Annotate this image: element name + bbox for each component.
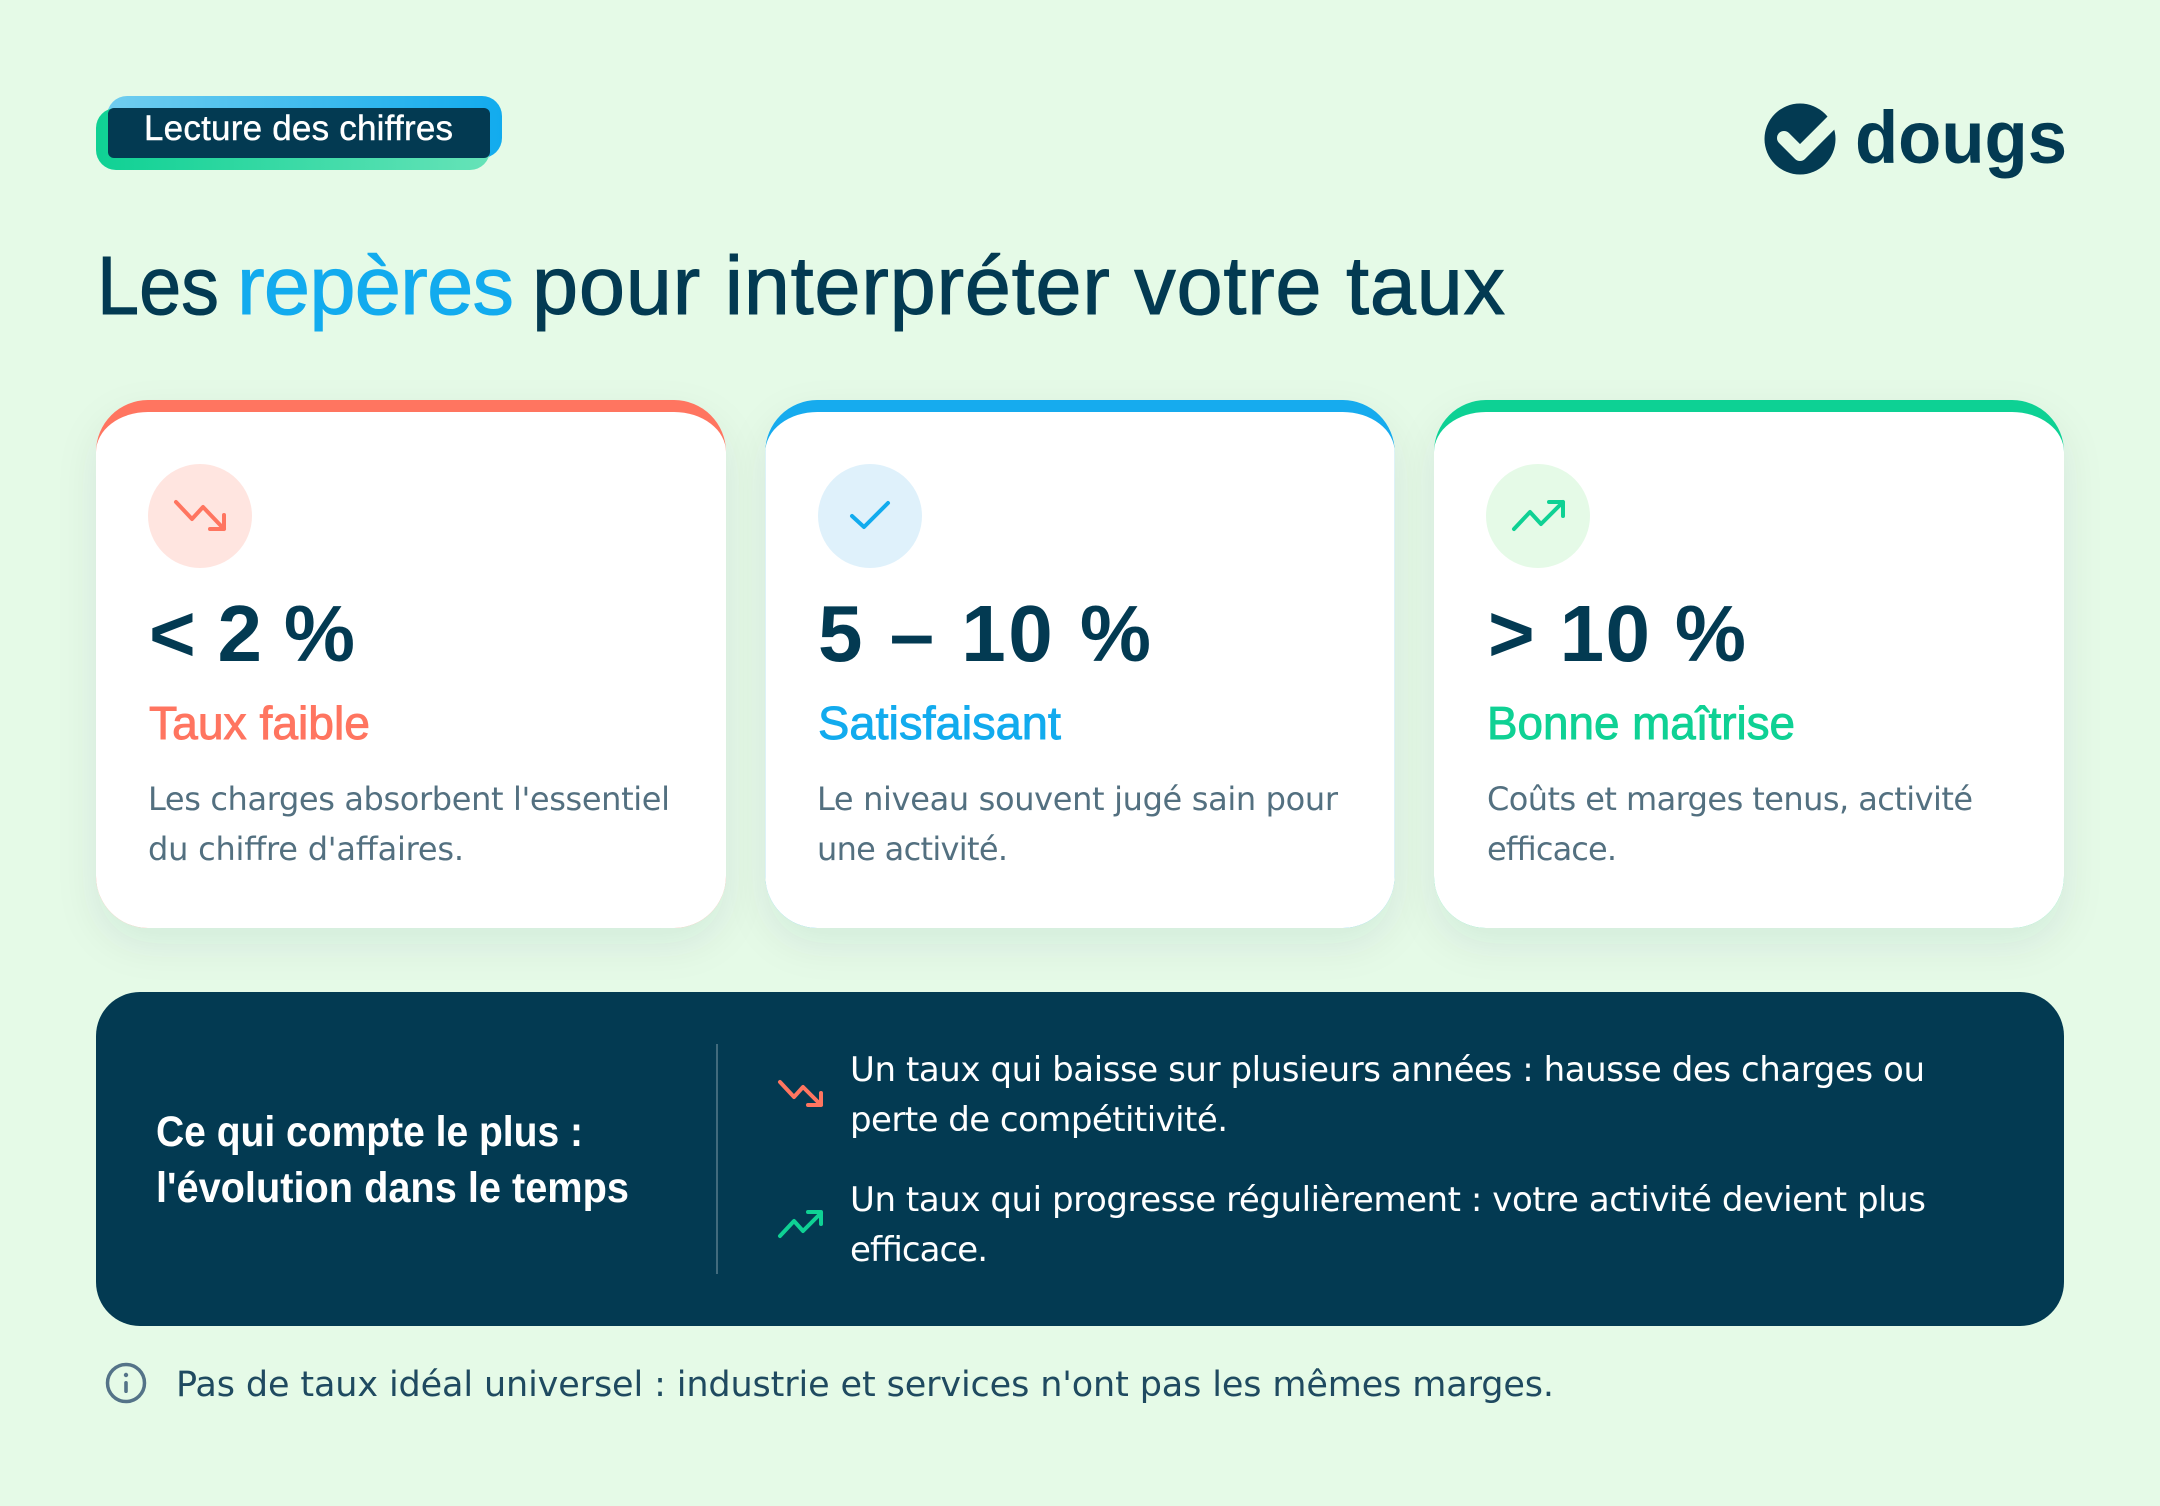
panel: taux faible [96,400,726,928]
title: Les [97,239,219,332]
icon: arrow up [780,1212,821,1236]
panel: satisfaisant [765,400,1395,928]
description: Le niveau souvent jugé sain pour [817,780,1339,818]
badge: Lecture des chiffres: Lecture des chiffres [144,109,453,148]
callout heading [156,1108,629,1212]
range value: < 2 % [149,589,355,678]
description [817,780,1339,868]
description [1487,780,1973,868]
logo: dougs: dougs [1855,96,2067,179]
title: pour interpréter votre taux [532,239,1505,332]
panel: evolution callout [96,992,2064,1326]
badge: Lecture des chiffres [96,96,502,170]
icon: info [108,1364,144,1402]
callout heading: l'évolution dans le temps [156,1164,629,1212]
description: efficace. [1487,830,1617,868]
description: du chiffre d'affaires. [148,830,464,868]
label: Bonne maîtrise [1487,697,1795,749]
text: rising rate: efficace. [850,1230,988,1270]
description: Les charges absorbent l'essentiel [148,780,670,818]
range value: > 10 % [1488,589,1746,678]
description: une activité. [817,830,1008,868]
title [97,239,1505,332]
title: repères [237,239,514,332]
icon: arrow down [780,1082,821,1105]
footnote: Pas de taux idéal universel : industrie et services n'ont pas les mêmes marges. [176,1365,1554,1405]
label: Satisfaisant [818,697,1061,749]
text: falling rate: perte de compétitivité. [850,1100,1228,1140]
icon: trend down [148,464,252,568]
label: Taux faible [149,697,370,749]
panel: bonne maîtrise [1434,400,2064,928]
text: falling rate: Un taux qui baisse sur plusieurs années : hausse des charges ou [850,1050,1925,1090]
icon: trend up [1486,464,1590,568]
icon: check [818,464,922,568]
callout heading: Ce qui compte le plus : [156,1108,583,1156]
text: falling rate [850,1050,1925,1140]
text: rising rate [850,1180,1926,1270]
range value: 5 – 10 % [818,589,1151,678]
text: rising rate: Un taux qui progresse régulièrement : votre activité devient plus [850,1180,1926,1220]
logo: dougs [1764,96,2067,179]
description [148,780,670,868]
description: Coûts et marges tenus, activité [1487,780,1973,818]
